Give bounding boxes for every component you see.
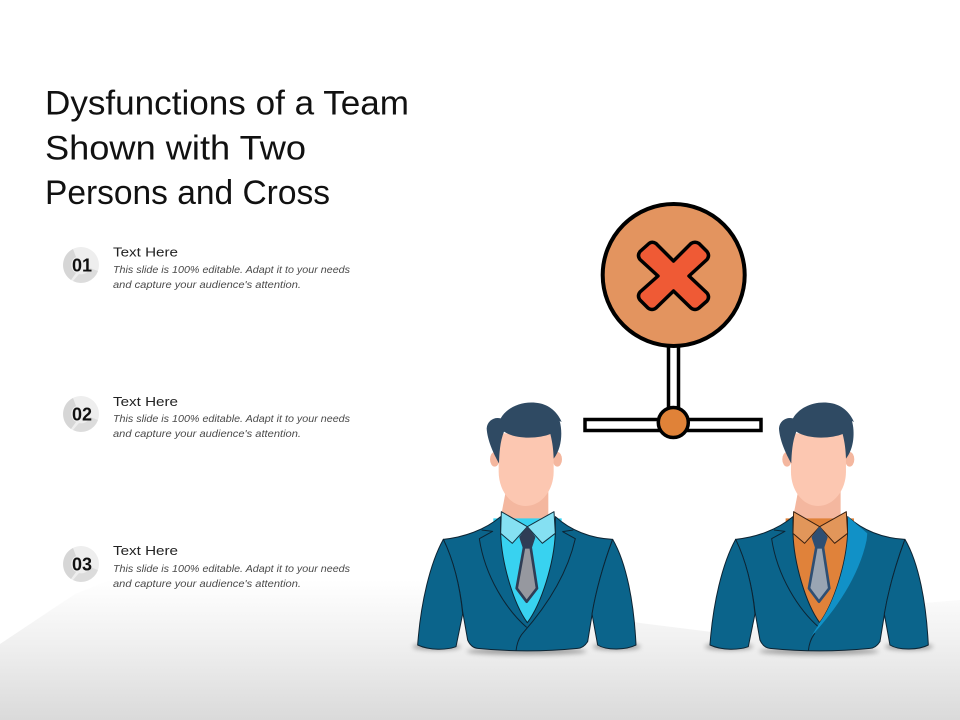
ground shadow — [413, 643, 641, 655]
person left — [413, 402, 641, 655]
shirt — [493, 518, 562, 630]
person right — [705, 402, 933, 655]
connector between persons and cross — [585, 345, 761, 438]
head — [487, 402, 562, 527]
text block 02: and capture your audience's attention. — [113, 428, 301, 440]
ground shadow — [705, 643, 933, 655]
light blue lapel — [812, 517, 867, 636]
text block 02: This slide is 100% editable. Adapt it to your needs — [113, 413, 351, 425]
list item 01 — [63, 244, 351, 291]
jacket — [710, 517, 928, 651]
text block 03 — [113, 543, 351, 590]
text block 03: Text Here — [113, 543, 178, 558]
text block 02: Text Here — [113, 394, 178, 409]
text block 02 — [113, 394, 351, 440]
badge 03: 03 — [72, 554, 92, 574]
text block 01: and capture your audience's attention. — [113, 279, 301, 291]
head — [779, 402, 854, 527]
badge 03 — [63, 546, 99, 582]
tie — [809, 528, 829, 602]
title: Dysfunctions of a Team — [45, 84, 409, 122]
text block 01: Text Here — [113, 244, 178, 260]
title: Shown with Two — [45, 130, 306, 168]
badge 01 — [63, 247, 99, 283]
jacket — [418, 517, 636, 651]
badge 02 — [63, 396, 99, 432]
title: Persons and Cross — [45, 174, 330, 212]
text block 01 — [113, 244, 351, 291]
collar — [793, 512, 848, 543]
icon: cross in circle — [603, 204, 745, 346]
text block 03: and capture your audience's attention. — [113, 578, 301, 590]
tie — [517, 528, 537, 602]
list item 03 — [63, 543, 351, 590]
collar — [501, 512, 555, 543]
text block 01: This slide is 100% editable. Adapt it to your needs — [113, 264, 351, 276]
text block 03: This slide is 100% editable. Adapt it to your needs — [113, 563, 351, 575]
badge 02: 02 — [72, 404, 92, 424]
title — [45, 84, 409, 212]
shirt — [786, 518, 854, 630]
list item 02 — [63, 394, 351, 440]
badge 01: 01 — [72, 256, 92, 276]
